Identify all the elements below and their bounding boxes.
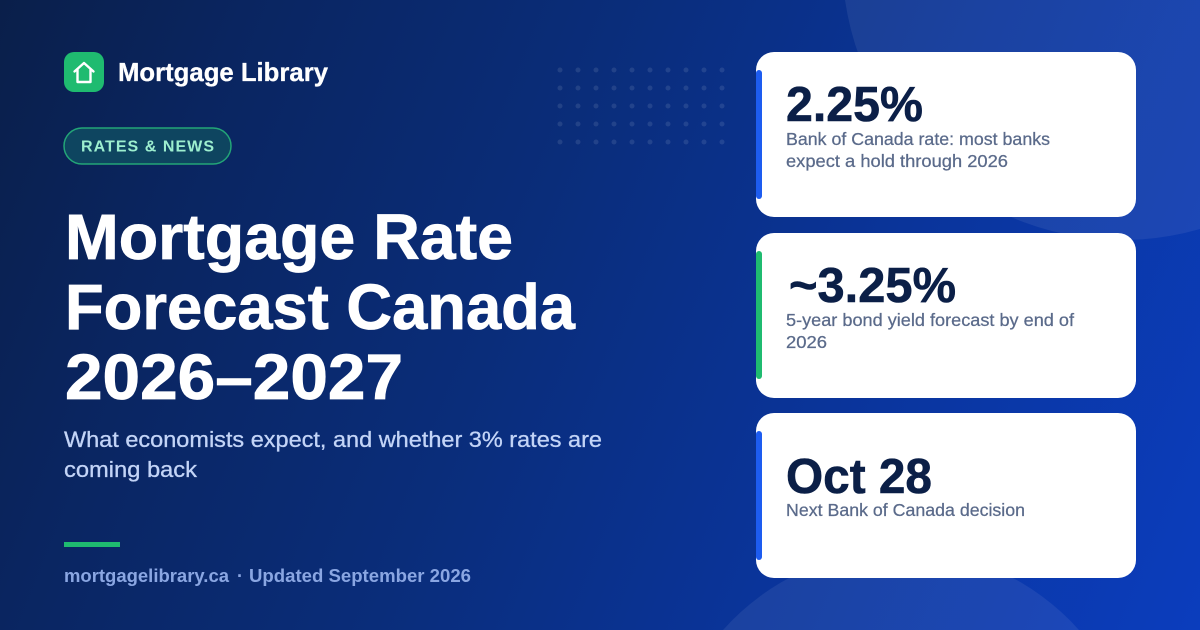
badge: rates and news: RATES & NEWS xyxy=(81,138,214,156)
logo: Mortgage Library xyxy=(64,52,329,92)
stat description: Next Bank of Canada decision xyxy=(786,500,1025,520)
subtitle: What economists expect, and whether 3% rates are xyxy=(64,427,602,452)
footer: site and update date xyxy=(64,566,471,586)
stat description xyxy=(786,129,1050,171)
footer: site and update date: mortgagelibrary.ca xyxy=(64,566,230,586)
stat description: expect a hold through 2026 xyxy=(786,151,1008,171)
icon: house xyxy=(64,52,104,92)
title: 2026–2027 xyxy=(65,341,403,413)
accent bar: green xyxy=(756,251,762,379)
stat description: Bank of Canada rate: most banks xyxy=(786,129,1050,149)
stat description: 2026 xyxy=(786,332,827,352)
stat description: 5-year bond yield forecast by end of xyxy=(786,310,1074,330)
title: Forecast Canada xyxy=(65,271,575,343)
stat: Oct 28: Oct 28 xyxy=(786,450,932,504)
accent rule xyxy=(64,542,120,547)
title: Mortgage Rate xyxy=(65,201,513,273)
accent bar: blue xyxy=(756,70,762,199)
panel: 5-year bond yield xyxy=(756,233,1136,398)
footer: site and update date: Updated September 2026 xyxy=(249,566,471,586)
panel: next decision xyxy=(756,413,1136,578)
subtitle: coming back xyxy=(64,457,198,482)
panel: Bank of Canada rate xyxy=(756,52,1136,217)
stat: 2.25%: 2.25% xyxy=(786,78,923,132)
subtitle xyxy=(64,427,602,482)
badge: rates and news xyxy=(64,128,231,164)
stat: ~3.25%: ~3.25% xyxy=(789,259,956,313)
title xyxy=(65,201,575,413)
footer: site and update date: · xyxy=(237,566,243,586)
brand name: Mortgage Library xyxy=(118,57,329,87)
accent bar: blue xyxy=(756,431,762,560)
stat description xyxy=(786,310,1074,352)
